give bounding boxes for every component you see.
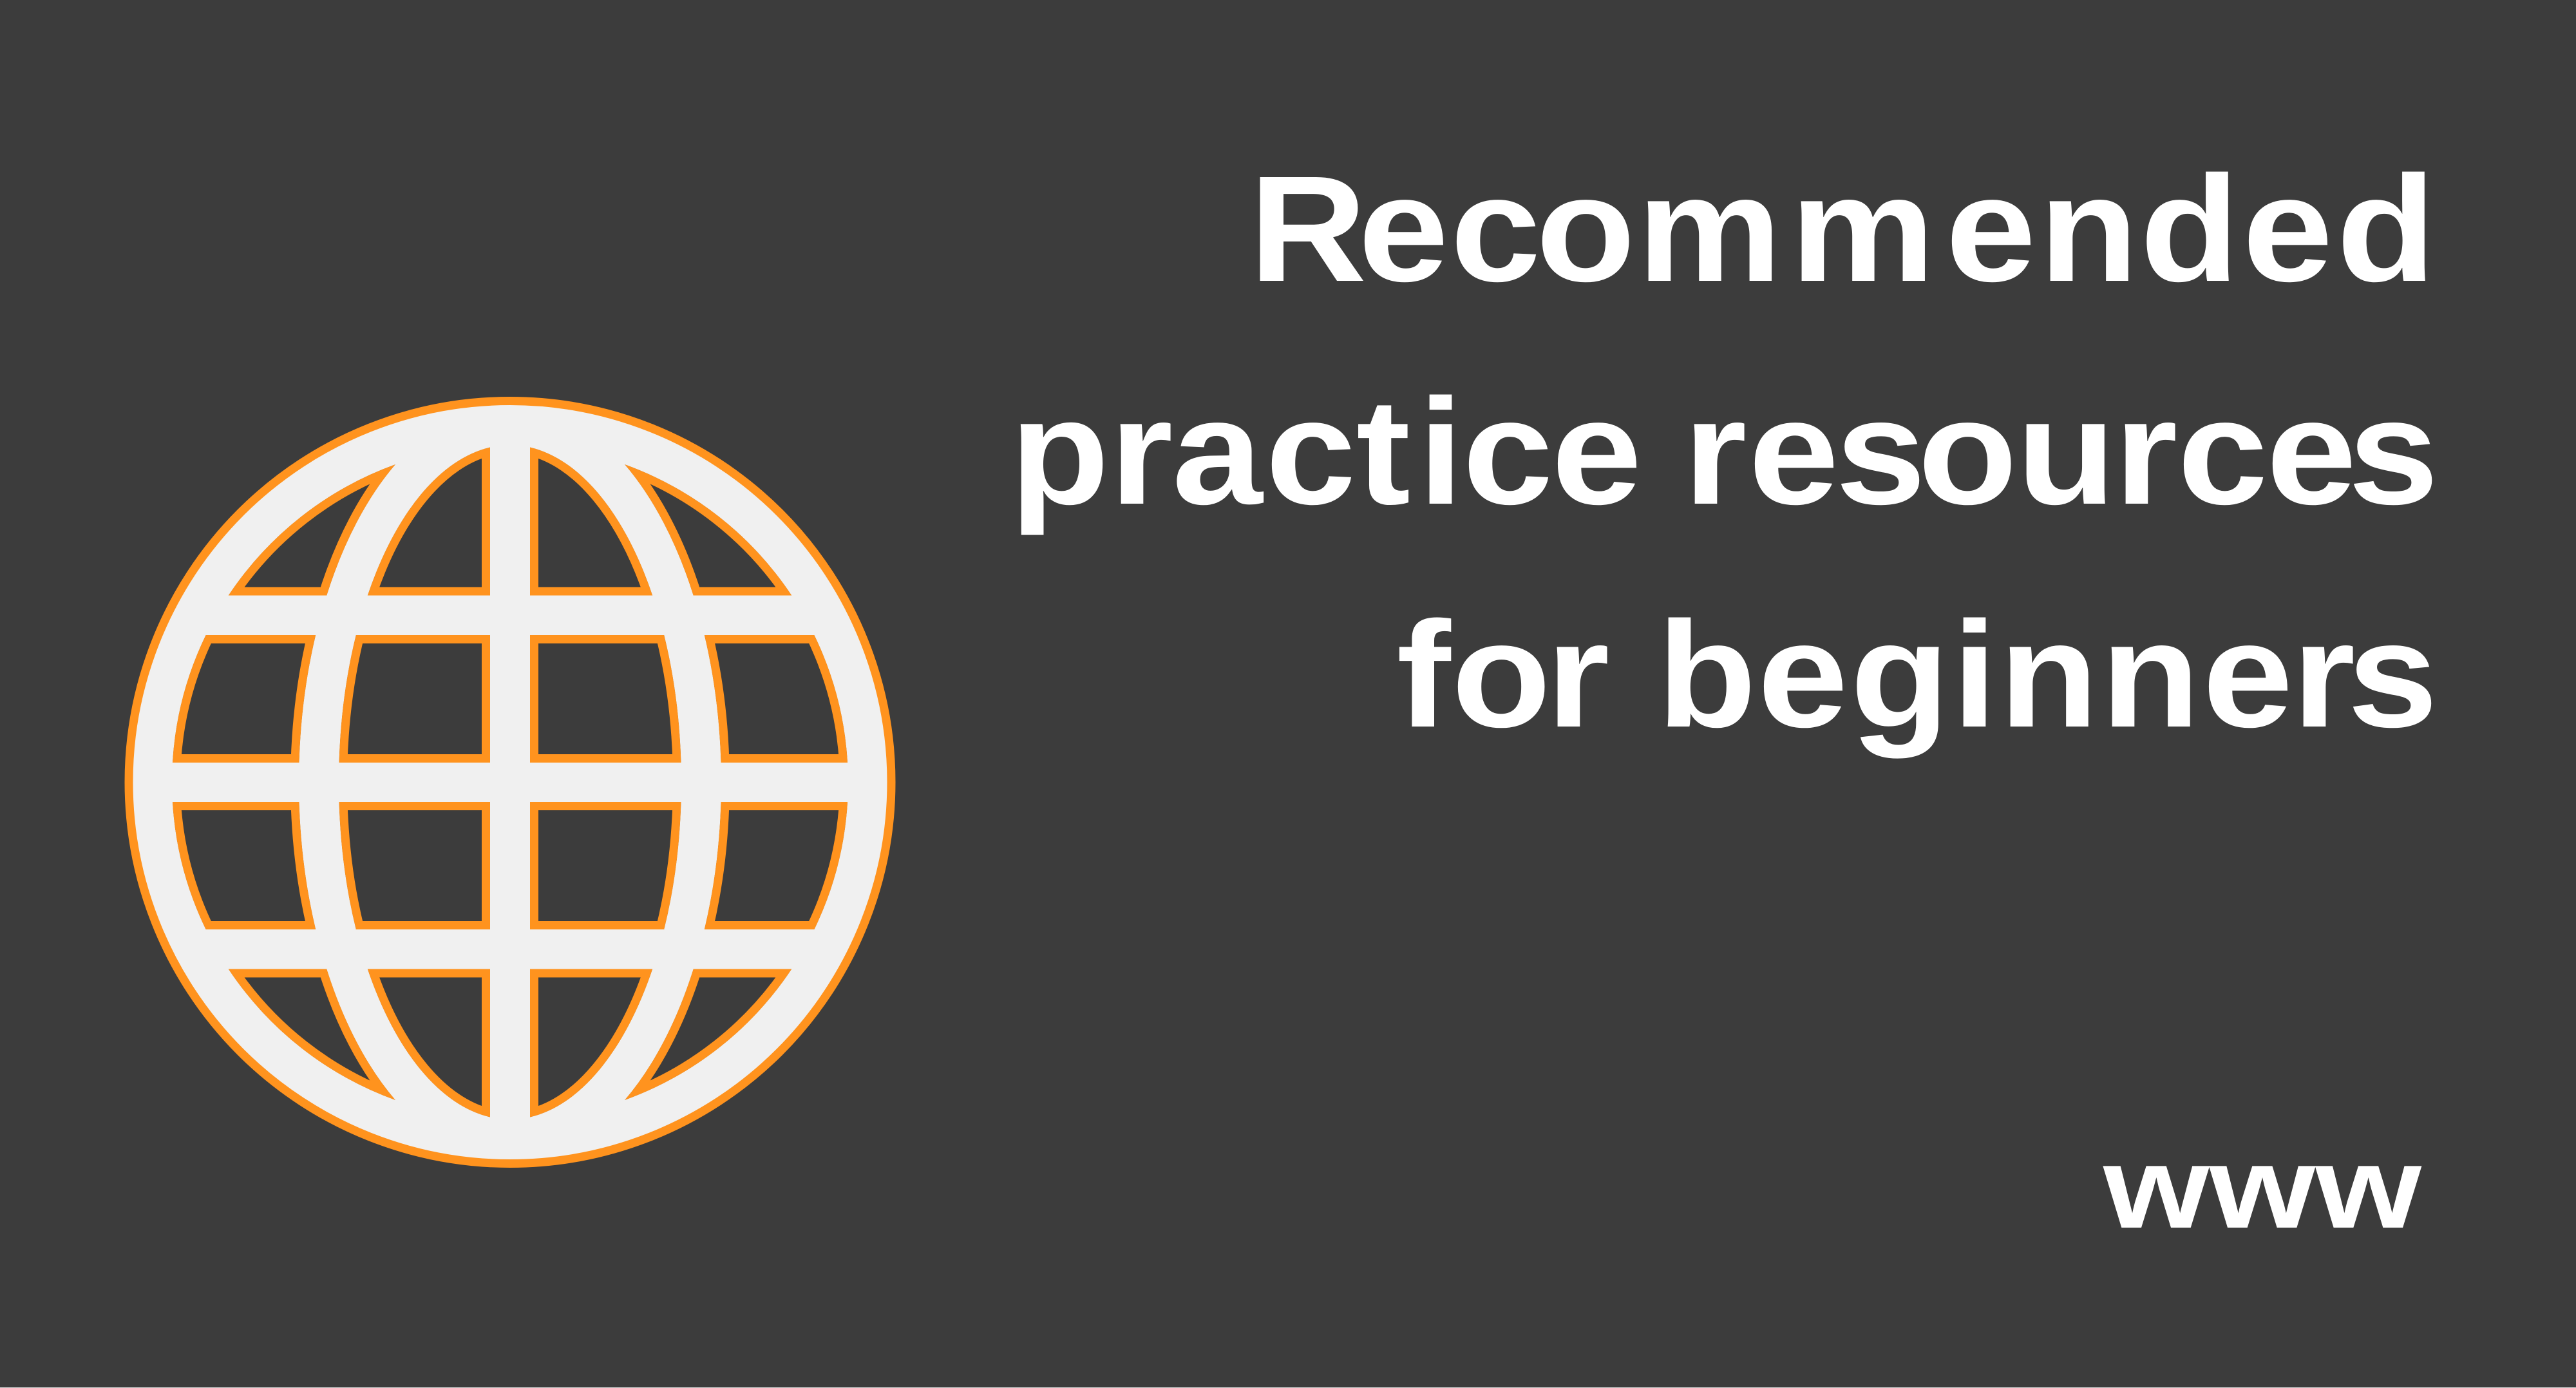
title bbox=[1010, 145, 2439, 759]
globe cells: top-left quadrant bbox=[173, 447, 490, 763]
title line 3: for beginners bbox=[1397, 591, 2438, 759]
title line 1: Recommended bbox=[1249, 145, 2436, 313]
www label: www bbox=[2103, 1123, 2422, 1253]
globe cells: bottom-right quadrant bbox=[530, 802, 848, 1117]
globe cells: bottom-left quadrant bbox=[173, 802, 490, 1117]
icon: globe bbox=[129, 401, 891, 1163]
globe cells: top-right quadrant bbox=[530, 447, 848, 763]
globe disc bbox=[129, 401, 891, 1163]
title line 2: practice resources bbox=[1010, 368, 2439, 536]
